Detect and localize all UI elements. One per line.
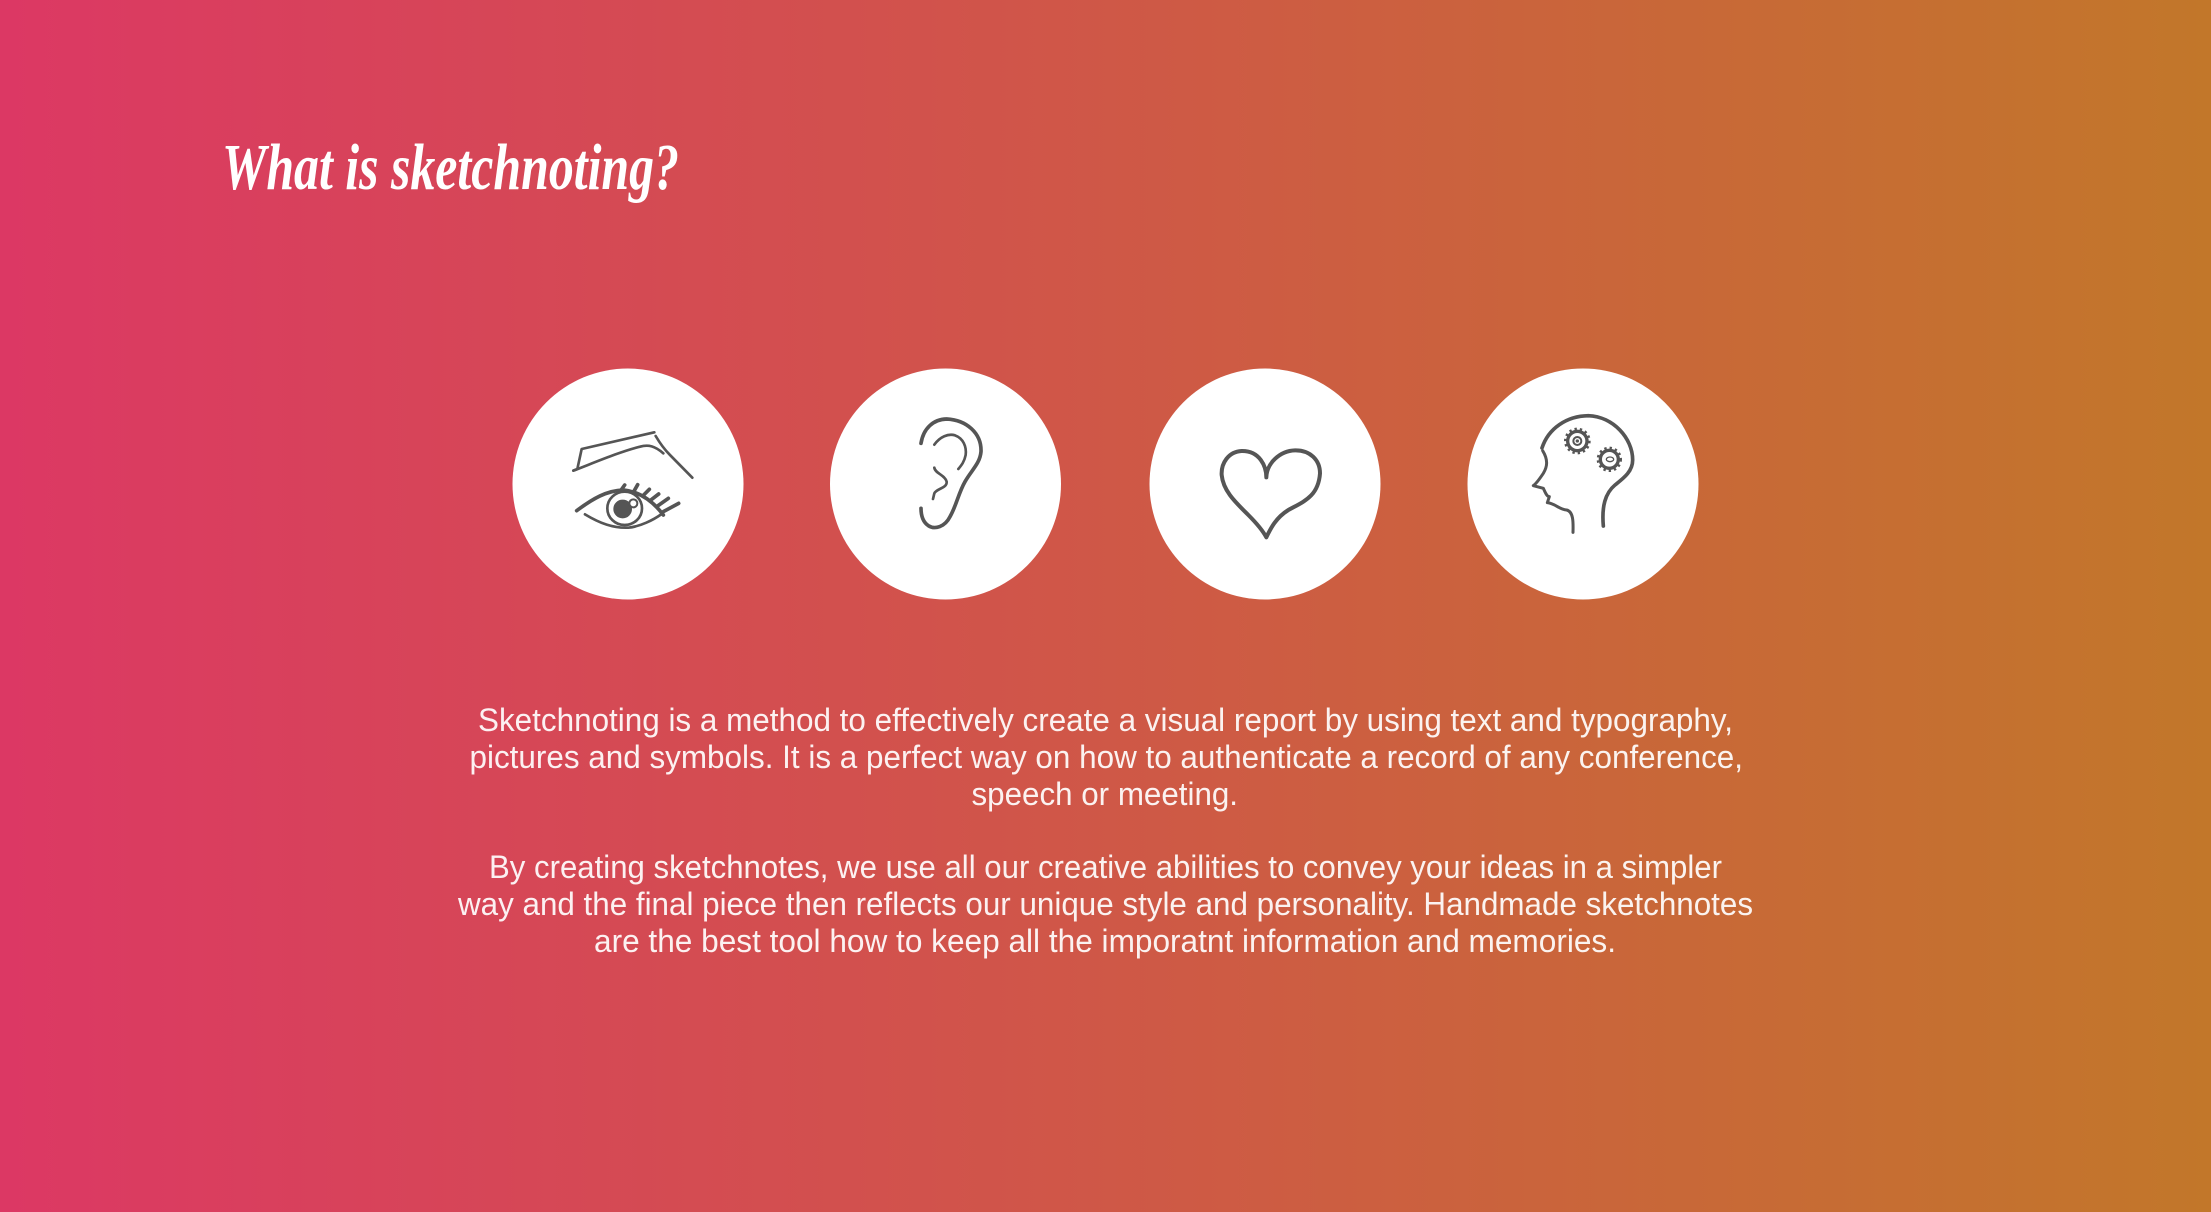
icon: heart in white circle [1150,368,1380,600]
icon: head with gears in white circle [1468,368,1698,600]
icon: eye in white circle [512,368,744,600]
text block: first paragraph: Sketchnoting is a method to effectively create a visual report by using text and typography, [478,702,1733,738]
title: What is sketchnoting? [222,131,679,204]
text block: second paragraph: are the best tool how to keep all the imporatnt information and memories. [594,923,1616,959]
text block: first paragraph: speech or meeting. [972,776,1238,812]
text block: first paragraph: pictures and symbols. It is a perfect way on how to authenticate a record of any conference, [470,739,1743,775]
icon: ear in white circle [830,368,1061,600]
text block: second paragraph [457,849,1753,959]
text block: first paragraph [470,702,1743,812]
text block: second paragraph: way and the final piece then reflects our unique style and personality. Handmade sketchnotes [457,886,1753,922]
text block: second paragraph: By creating sketchnotes, we use all our creative abilities to convey your ideas in a simpler [489,849,1722,885]
